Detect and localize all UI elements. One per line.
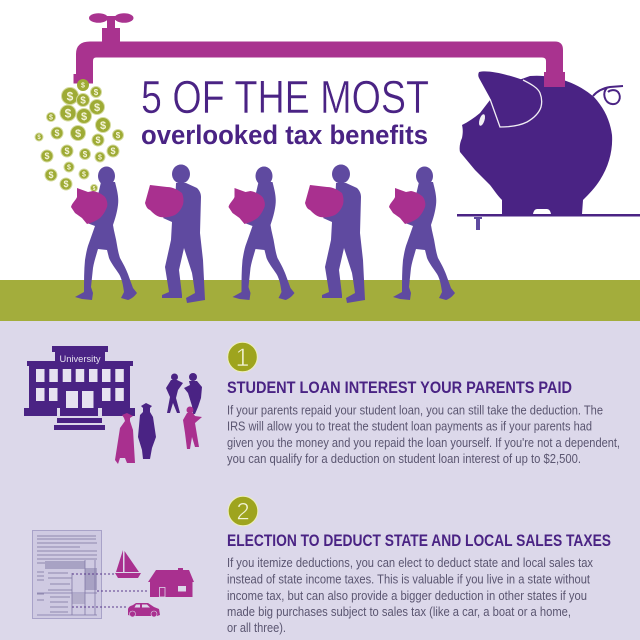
person: woman carrying piggy bank 3 (389, 166, 455, 300)
text block: section 2: made big purchases subject to sales tax (like a car, a boat or a home, (227, 605, 571, 619)
badge: number 1: 1 (236, 344, 249, 372)
badge: number 2: 2 (236, 498, 250, 526)
text block: section 1: IRS will allow you to treat the student loan payments as if your parents had (227, 420, 592, 434)
background ground band (0, 280, 640, 321)
icon: dollar coins falling: $ (110, 146, 116, 156)
icon: house (148, 568, 194, 597)
text block: section 1 (227, 404, 620, 466)
icon: sailboat (115, 550, 141, 578)
icon: dollar coins falling: $ (95, 135, 101, 145)
people: graduates (115, 403, 156, 464)
text block: section 1: you can qualify for a deduction on student loan interest of up to $2,500. (227, 452, 581, 466)
badge: number 1 (228, 342, 257, 372)
icon: dollar coins falling: $ (100, 120, 106, 132)
icon: dollar coins falling: $ (44, 151, 50, 161)
text block: section 2: or all three). (227, 621, 286, 635)
icon: dollar coins falling: $ (81, 82, 85, 90)
title: 5 OF THE MOST (141, 71, 429, 123)
person: woman carrying piggy bank 1 (71, 166, 137, 300)
icon: tax form (32, 530, 102, 618)
text block: section 2: instead of state income taxes. This is valuable if you live in a state without (227, 572, 590, 586)
icon: dollar coins falling: $ (82, 172, 86, 178)
icon: large piggy bank on shelf (457, 71, 640, 230)
lavender lower panel (0, 321, 640, 640)
icon: dollar coins falling: $ (98, 154, 102, 162)
icon: dollar coins falling: $ (94, 102, 100, 114)
person: man carrying piggy bank 2 (305, 164, 365, 303)
icon: dollar coins falling: $ (49, 114, 53, 122)
title: overlooked tax benefits (141, 120, 428, 150)
icon: dollar coins falling: $ (80, 96, 86, 106)
person: woman carrying piggy bank 2 (228, 166, 294, 300)
text block: section 2: income tax, but can also provide a bigger deduction in other states if you (227, 589, 587, 603)
person: man carrying piggy bank 1 (145, 164, 205, 303)
icon: dollar coins falling: $ (67, 90, 74, 104)
icon: university building (24, 346, 135, 430)
icon: car (128, 603, 160, 617)
icon: dollar coins falling: $ (48, 170, 54, 180)
heading: section 1: STUDENT LOAN INTEREST YOUR PARENTS PAID (227, 378, 572, 397)
icon: dollar coins falling: $ (37, 135, 41, 141)
icon: dollar coins falling: $ (64, 146, 70, 156)
icon: dollar coins falling: $ (65, 106, 72, 120)
title (141, 71, 429, 150)
icon: dollar coins falling: $ (94, 88, 99, 97)
icon: university building: University (60, 354, 101, 365)
icon: dollar coins falling: $ (116, 131, 121, 140)
icon: dollar coins falling: $ (83, 150, 88, 159)
icon: dollar coins falling: $ (93, 186, 96, 192)
icon: dollar coins falling: $ (54, 128, 60, 138)
icon: faucet and pipe (74, 13, 563, 84)
people: students talking (166, 373, 202, 449)
icon: dollar coins falling (35, 79, 124, 192)
text block: section 1: If your parents repaid your student loan, you can still take the deduction. The (227, 404, 603, 418)
icon: dollar coins falling: $ (67, 164, 71, 172)
text block: section 2: If you itemize deductions, you can elect to deduct state and local sales tax (227, 556, 594, 570)
icon: dollar coins falling: $ (63, 179, 69, 189)
text block: section 2 (227, 556, 594, 635)
badge: number 2 (228, 496, 258, 526)
icon: dollar coins falling: $ (75, 128, 81, 140)
dotted connector lines (72, 574, 148, 607)
icon: dollar coins falling: $ (81, 111, 87, 123)
